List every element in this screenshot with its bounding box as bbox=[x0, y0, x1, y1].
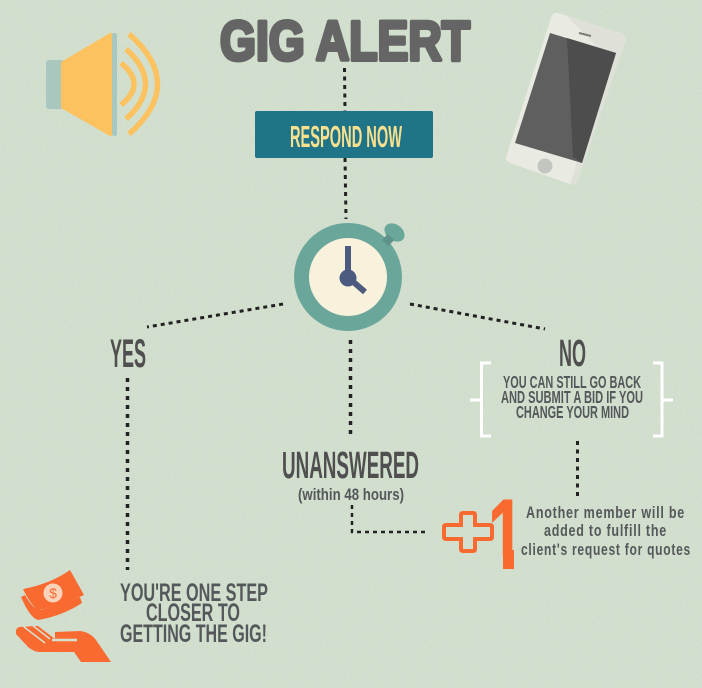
infographic: YES bbox=[110, 332, 146, 376]
bracketed note bbox=[470, 363, 673, 436]
bracketed note: CHANGE YOUR MIND bbox=[516, 402, 629, 422]
connector: button to stopwatch bbox=[345, 158, 346, 219]
button: respond now bbox=[255, 111, 433, 158]
connector: to no bbox=[410, 304, 545, 329]
result text: CLOSER TO bbox=[146, 599, 240, 627]
connector: to unanswered bbox=[349, 340, 352, 436]
icon: plus one: 1 bbox=[488, 479, 524, 591]
button: respond now: RESPOND NOW bbox=[290, 119, 402, 154]
result text: YOU'RE ONE STEP bbox=[120, 579, 268, 607]
connector: yes to result bbox=[126, 378, 129, 570]
connector: title to button bbox=[343, 68, 346, 111]
result text: GETTING THE GIG! bbox=[120, 620, 267, 648]
icon: smartphone bbox=[506, 13, 626, 184]
icon: stopwatch bbox=[294, 220, 408, 331]
result text bbox=[120, 579, 268, 648]
infographic: NO bbox=[559, 333, 586, 375]
icon: speaker bbox=[46, 33, 158, 136]
icon: money in hand bbox=[16, 570, 111, 662]
note: another member bbox=[521, 504, 691, 559]
icon: money in hand: $ bbox=[49, 585, 57, 601]
label: unanswered: (within 48 hours) bbox=[298, 485, 404, 504]
label: unanswered bbox=[282, 445, 419, 504]
connector: unanswered to plus one bbox=[352, 505, 426, 532]
note: another member: added to fulfill the bbox=[544, 522, 667, 540]
connector: to yes bbox=[147, 304, 283, 327]
icon: plus one bbox=[442, 500, 514, 569]
title: GIG ALERT bbox=[220, 9, 470, 72]
infographic: UNANSWERED bbox=[282, 445, 419, 487]
connector: no to plus one bbox=[576, 441, 579, 496]
